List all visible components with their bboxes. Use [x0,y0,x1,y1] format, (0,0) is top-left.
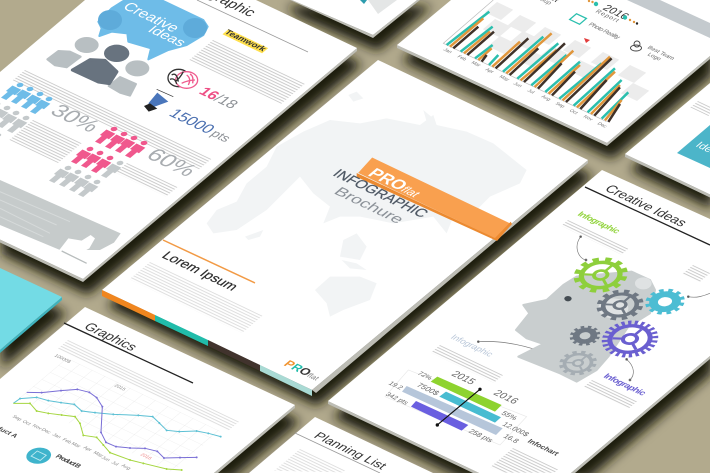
stat: 30%: 30% [45,100,106,136]
bubble title: Ideas [145,23,190,49]
infochart note: Infochart [525,437,562,457]
banner text: PRO flat: PROflat [364,165,427,201]
month labels: Aug [539,94,552,102]
paragraph [690,101,710,116]
month labels: Nov [581,114,595,122]
month labels: Jun [511,81,524,89]
decorative dots [588,0,638,25]
label: best team logo: Best Team [645,45,675,61]
axis labels: Mar [69,441,82,449]
orange title banner [355,158,512,241]
paragraph: 60% [116,163,177,197]
line series [13,389,221,470]
gear: green [567,253,635,297]
chart axes [443,0,607,122]
chart labels: 342 pts [383,392,410,406]
month labels: Sep [553,101,566,109]
chart labels: 72% [415,371,433,381]
subtitle: brochure: Brochure [330,185,408,227]
page: planning list [249,417,433,473]
colour edge strip [102,290,312,396]
month labels: Jul [525,88,536,95]
year label: 2015 [112,383,127,392]
chart labels: 7500$ [414,381,442,397]
chart labels: 258 pts [466,427,496,444]
connector lines [477,236,710,381]
icon: product circle [21,444,56,467]
month labels [441,47,609,129]
paragraph [129,262,262,333]
paragraph [274,449,345,473]
stat: 60%: 60% [141,144,203,180]
gear: gray middle [590,286,650,324]
icon: group of people [47,37,149,96]
chart labels: 55% [499,409,520,422]
month labels: Oct [567,108,580,116]
gear: dark small [566,323,604,348]
people: gray rows left [0,100,33,146]
page: creative ideas infographic [0,0,357,282]
paragraph: main body [13,70,211,169]
icon: pen tool [144,89,173,112]
axis labels: Sep [10,414,23,422]
chart labels: 2015 [448,370,478,387]
gear: purple [594,316,666,362]
gear: light [554,348,602,378]
infochart note [490,437,562,473]
callout: purple infographic [584,372,649,409]
heading rule [197,0,308,52]
title: Planning List [311,430,390,472]
axis labels: Dec [39,427,53,435]
icon: photo [570,14,586,24]
paragraph: 30% [9,120,82,163]
teal banner [677,125,710,168]
people: blue row [0,81,56,115]
page: brochure cover [102,60,588,396]
gear: teal [640,286,690,318]
page: ideas sheet right [625,83,710,198]
title rule [295,433,380,473]
orange rule [163,240,255,283]
bars: dark [453,27,620,122]
heading: 2016 report: 2016 [600,3,631,22]
month labels: Apr [483,67,495,75]
people: pink rows [69,125,151,174]
speech bubble [98,1,208,59]
callout: pale infographic [431,333,503,383]
page: teal cover sheet [0,268,62,353]
page: top small sheet [290,0,420,38]
axis labels [10,353,132,471]
chart labels [383,370,532,445]
heading: lorem ipsum: Lorem Ipsum [159,249,242,293]
callout: blue text right [682,265,710,282]
pink series label: 2016 [138,452,153,461]
head silhouette [516,272,655,382]
paragraph: teamwork [189,40,305,104]
gray thumbs-up banner [0,180,121,263]
title rule [64,323,193,383]
title: Creative Ideas [602,182,691,229]
bars: orange [450,18,622,120]
icon: team [630,41,642,51]
axis labels: Nov [30,423,44,431]
title: infographic: INFOGRAPHIC [329,167,431,221]
gray header band [627,0,710,38]
month labels: Feb [455,54,468,62]
month labels: Jan [441,47,454,55]
chart labels: 16.8 [501,432,521,445]
stat: 16/18: 16/18 [195,85,242,112]
bars: teal [447,12,628,119]
title rule [585,187,710,245]
title: Graphics [81,320,141,353]
axis labels: Feb [60,437,73,445]
bubble gears [98,10,207,38]
chart labels: 12.000$ [500,420,532,438]
axis labels: Aug [119,463,132,471]
callout: green infographic: Infographic [575,210,623,235]
label: best team logo: Logo [645,52,663,62]
callout: purple infographic: Infographic [601,372,649,397]
callout: pale infographic: Infographic [448,333,496,358]
axis labels: 10000$ [52,353,72,365]
chart labels: 2016 [490,389,521,406]
chart grid [18,358,220,472]
comparison bar chart [385,370,527,445]
logo: PRO flat: PROflat [281,358,325,383]
page: bar chart report [397,0,710,146]
page: creative ideas gears [328,170,710,473]
month labels: Mar [469,60,482,68]
axis labels: May [91,450,105,459]
axis labels: Oct [20,419,33,427]
month labels: Dec [595,121,609,129]
teamwork label: Teamwork [222,28,269,53]
page: graphics line chart [0,307,295,473]
axis labels: Jun [99,455,112,463]
chart labels: 19.2 [386,381,404,391]
stat: 15000 pts: 15000pts [165,107,235,145]
legend: product B: Product B [53,454,82,469]
world map [207,92,527,317]
axis labels: Jul [109,460,120,467]
label: photo reality: Photo Reality [586,22,622,41]
paragraph [57,340,239,431]
axis labels: Apr [81,445,93,453]
heading: 2016 report: Report [593,9,621,24]
month labels: May [497,74,511,83]
icon: brain [168,69,198,88]
people: gray rows right [47,159,127,198]
bubble title: Creative [119,0,183,35]
callout: green infographic [561,210,628,255]
bubble title [119,0,190,49]
icon: red marker [584,38,590,43]
checker backdrop [483,2,649,101]
axis labels: Jan [50,432,63,440]
